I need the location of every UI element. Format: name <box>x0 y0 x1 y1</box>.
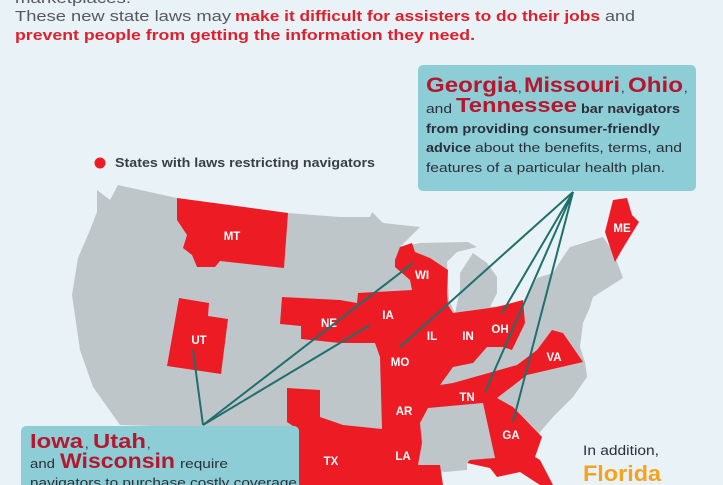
state labels: IL <box>427 331 437 343</box>
state labels: IN <box>462 331 474 343</box>
intro text: prevent people from getting the information they need. <box>15 27 475 44</box>
state: Maine <box>605 198 639 262</box>
intro text: and <box>605 8 635 25</box>
callout: Georgia, Missouri, Ohio, Tennessee: from providing consumer-friendly <box>426 121 661 136</box>
callout: Georgia, Missouri, Ohio, Tennessee: , <box>621 80 625 95</box>
state labels <box>191 223 631 468</box>
callout: Iowa, Utah, Wisconsin: require <box>180 456 228 471</box>
callout: Georgia, Missouri, Ohio, Tennessee: about the benefits, terms, and <box>475 140 682 155</box>
state labels: AR <box>396 406 413 418</box>
callout: Iowa, Utah, Wisconsin: , <box>147 436 151 451</box>
callout: Iowa, Utah, Wisconsin: Utah <box>93 431 146 453</box>
state labels: TN <box>459 392 475 404</box>
state labels: MT <box>224 231 240 243</box>
state: Montana <box>177 198 288 268</box>
callout: Iowa, Utah, Wisconsin <box>21 426 299 485</box>
callout: Iowa, Utah, Wisconsin: and <box>30 456 55 471</box>
state labels: ME <box>613 223 631 235</box>
callout: Georgia, Missouri, Ohio, Tennessee: Ohio <box>628 74 683 97</box>
restricted states block <box>280 243 583 485</box>
intro text <box>15 0 635 44</box>
callout: Georgia, Missouri, Ohio, Tennessee: Tennessee <box>456 95 577 117</box>
state labels: NE <box>321 318 337 330</box>
callout: Georgia, Missouri, Ohio, Tennessee: bar navigators <box>581 101 680 116</box>
callout: Georgia, Missouri, Ohio, Tennessee: , <box>518 80 522 95</box>
state labels: GA <box>502 430 520 442</box>
callout: Iowa, Utah, Wisconsin: Iowa <box>30 431 84 453</box>
state labels: TX <box>324 456 339 468</box>
callout: Georgia, Missouri, Ohio, Tennessee: , <box>684 80 688 95</box>
intro text: make it difficult for assisters to do their jobs <box>235 8 600 25</box>
callout: Iowa, Utah, Wisconsin: , <box>85 436 89 451</box>
connector lines: upper callout <box>400 192 573 422</box>
callout: Georgia, Missouri, Ohio, Tennessee: and <box>426 101 452 116</box>
note: Florida <box>583 443 662 485</box>
state labels: MO <box>391 357 409 369</box>
callout: Georgia, Missouri, Ohio, Tennessee: Georgia <box>426 74 517 97</box>
callout: Iowa, Utah, Wisconsin: Wisconsin <box>60 450 175 473</box>
state labels: IA <box>382 310 394 322</box>
legend: States with laws restricting navigators <box>115 155 375 170</box>
state labels: LA <box>395 451 411 463</box>
state: Utah <box>167 298 228 374</box>
callout: Georgia, Missouri, Ohio, Tennessee: features of a particular health plan. <box>426 160 665 175</box>
state labels: VA <box>546 352 562 364</box>
intro text: These new state laws may <box>15 8 232 25</box>
map of the United States <box>72 185 639 485</box>
callout: Georgia, Missouri, Ohio, Tennessee: advice <box>426 140 471 155</box>
land base <box>72 185 623 472</box>
callout: Georgia, Missouri, Ohio, Tennessee: Missouri <box>524 74 620 97</box>
note: Florida: In addition, <box>583 443 659 458</box>
state labels: UT <box>191 335 207 347</box>
state labels: OH <box>491 324 509 336</box>
connector lines: lower callout <box>193 263 413 425</box>
state labels: WI <box>415 270 429 282</box>
callout: Georgia, Missouri, Ohio, Tennessee <box>418 65 696 191</box>
